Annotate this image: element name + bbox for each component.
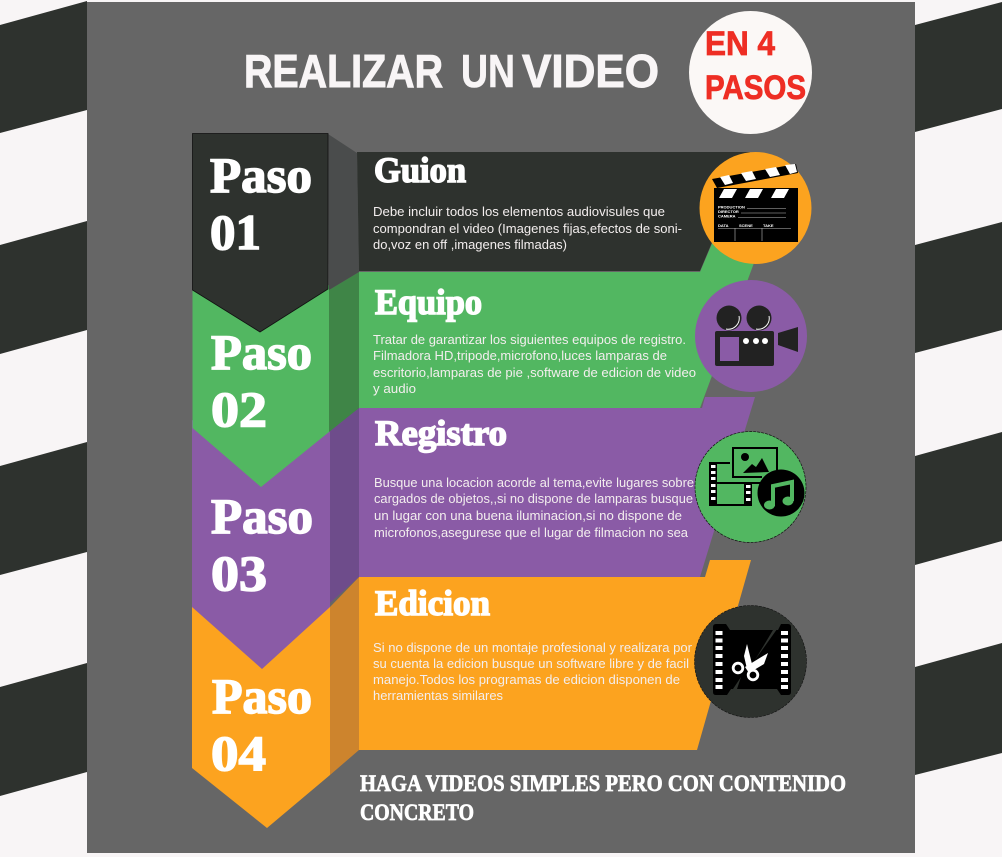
paso 04 label: 04 [211, 725, 266, 781]
panel: paso 02 chevron and fold [192, 272, 359, 487]
panel: paso 01 chevron and fold [192, 134, 359, 332]
text block: registro: Busque una locacion acorde al tema,evite lugares sobre [374, 475, 694, 490]
badge: en 4 pasos [689, 11, 812, 134]
icon: cut film on dark circle [694, 606, 806, 718]
paso 03 label: 03 [211, 545, 267, 601]
badge: en 4 pasos: PASOS [705, 69, 806, 107]
icon: clapperboard on orange circle: CAMERA [718, 214, 736, 218]
panel: registro banner [359, 397, 755, 577]
text block: equipo [373, 332, 696, 396]
text block: edicion: su cuenta la edicion busque un software libre y de facil [373, 656, 689, 671]
text block: guion: compondran el video (Imagenes fijas,efectos de soni- [373, 221, 682, 236]
heading: equipo: Equipo [375, 282, 482, 322]
icon: clapperboard on orange circle: PRODUCTION [718, 204, 745, 210]
text block: edicion: manejo.Todos los programas de edicion disponen de [373, 672, 680, 687]
paso 02 label: Paso [211, 324, 312, 380]
paso 01 label: 01 [210, 204, 261, 260]
text block: edicion [373, 640, 693, 703]
title: VIDEO [522, 45, 659, 97]
panel: paso 03 chevron and fold [192, 408, 359, 669]
paso 04 label [211, 668, 312, 781]
icon: film camera on purple circle [695, 280, 807, 392]
panel: equipo banner [359, 220, 770, 408]
text block: registro: un lugar con una buena iluminacion,si no dispone de [374, 508, 682, 523]
heading: edicion: Edicion [375, 583, 490, 623]
paso 04 label: Paso [212, 668, 312, 724]
footer message: HAGA VIDEOS SIMPLES PERO CON CONTENIDO [360, 771, 846, 796]
text block: edicion: herramientas similares [373, 688, 503, 703]
heading: registro: Registro [375, 413, 507, 453]
footer message [360, 771, 846, 825]
left clapperboard stripes [0, 1, 87, 796]
text block: edicion: Si no dispone de un montaje profesional y realizara por [373, 640, 693, 655]
panel: edicion banner [359, 560, 751, 750]
icon: clapperboard on orange circle: SCENE [739, 223, 753, 228]
icon: clapperboard on orange circle: DIRECTOR [718, 209, 739, 214]
heading: guion: Guion [374, 150, 466, 190]
text block: equipo: escritorio,lamparas de pie ,software de edicion de video [373, 365, 696, 380]
text block: guion: Debe incluir todos los elementos audiovisules que [373, 204, 665, 219]
paso 02 label [211, 324, 312, 437]
badge: en 4 pasos: EN 4 [705, 25, 775, 63]
icon: clapperboard on orange circle: DATA [718, 223, 729, 228]
title: REALIZAR [244, 45, 443, 97]
text block: guion [373, 204, 682, 252]
paso 01 label [210, 147, 312, 260]
text block: registro: microfonos,asegurese que el lugar de filmacion no sea [374, 525, 689, 540]
text block: equipo: Filmadora HD,tripode,microfono,luces lamparas de [373, 348, 667, 363]
footer message: CONCRETO [360, 800, 474, 825]
text block: registro: cargados de objetos,,si no dispone de lamparas busque [374, 491, 693, 506]
icon: film, photo and music on green circle [695, 432, 806, 542]
icon: clapperboard on orange circle: TAKE [763, 223, 774, 228]
right clapperboard stripes [915, 2, 1002, 775]
text block: equipo: Tratar de garantizar los siguientes equipos de registro. [373, 332, 686, 347]
paso 02 label: 02 [211, 381, 267, 437]
text block: equipo: y audio [373, 381, 416, 396]
text block: registro [374, 475, 694, 540]
text block: guion: do,voz en off ,imagenes filmadas) [373, 237, 567, 252]
paso 03 label: Paso [211, 488, 313, 544]
panel: paso 04 chevron and fold [192, 577, 359, 828]
icon: clapperboard on orange circle [700, 152, 812, 264]
title [244, 45, 659, 97]
paso 01 label: Paso [210, 147, 312, 203]
paso 03 label [211, 488, 313, 601]
title: UN [461, 45, 515, 97]
panel: guion banner [357, 152, 750, 271]
